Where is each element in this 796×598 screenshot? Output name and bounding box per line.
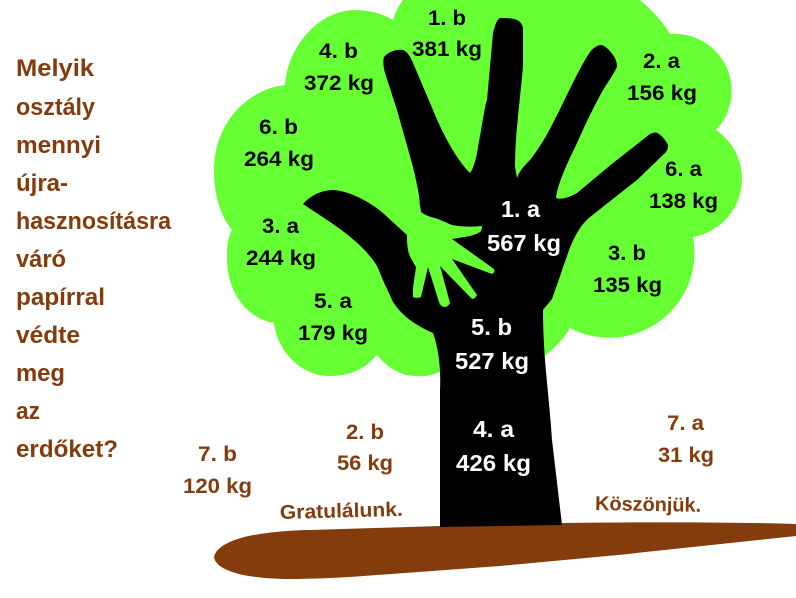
label: 7. b (183, 443, 252, 498)
question heading: meg (16, 360, 65, 387)
label: 5. a: 5. a (314, 290, 352, 313)
question heading: védte (16, 322, 80, 349)
label: 6. b: 264 kg (244, 148, 314, 171)
label: 6. a (649, 158, 718, 213)
ground (214, 522, 796, 579)
question heading: Melyik (16, 55, 95, 82)
label: 4. a: 4. a (473, 416, 514, 442)
question heading: osztály (16, 94, 96, 121)
question heading: mennyi (16, 132, 101, 159)
label: 7. b: 7. b (198, 443, 237, 466)
label: 1. b: 1. b (428, 7, 466, 30)
label: 3. b (593, 242, 662, 297)
note: Köszönjük: Köszönjük. (595, 493, 701, 517)
tree crown (214, 0, 742, 376)
note: Gratulálunk: Gratulálunk. (280, 499, 403, 524)
label: 2. b: 56 kg (337, 452, 393, 475)
label: 5. a: 179 kg (298, 322, 368, 345)
question heading (16, 55, 172, 463)
label: 5. b (455, 314, 529, 374)
question heading: erdőket? (16, 436, 118, 463)
label: 6. b (244, 116, 314, 171)
label: 6. a: 6. a (665, 158, 702, 181)
label: 1. a: 567 kg (487, 230, 561, 256)
question heading: az (16, 398, 40, 425)
label: 1. a: 1. a (501, 196, 540, 222)
label: 3. b: 3. b (608, 242, 646, 265)
label: 3. a: 3. a (262, 215, 299, 238)
label: 4. b: 4. b (319, 40, 358, 63)
label: 5. b: 5. b (471, 314, 512, 340)
label: 7. a (658, 412, 714, 467)
label: 1. b: 381 kg (412, 38, 482, 61)
label: 2. a (627, 50, 697, 105)
label: 2. b: 2. b (346, 421, 384, 444)
label: 2. b (337, 421, 393, 475)
label: 1. b (412, 7, 482, 61)
label: 2. a: 156 kg (627, 82, 697, 105)
label: 7. b: 120 kg (183, 475, 252, 498)
label: 4. b (304, 40, 374, 95)
question heading: váró (16, 246, 66, 273)
question heading: hasznosításra (16, 208, 172, 235)
label: 7. a: 31 kg (658, 444, 714, 467)
question heading: papírral (16, 284, 105, 311)
label: 6. a: 138 kg (649, 190, 718, 213)
label: 3. a: 244 kg (246, 247, 316, 270)
black hand-shaped tree trunk (303, 18, 668, 527)
label: 4. a: 426 kg (456, 450, 531, 476)
label: 5. b: 527 kg (455, 348, 529, 374)
label: 3. a (246, 215, 316, 270)
label: 2. a: 2. a (643, 50, 680, 73)
label: 4. b: 372 kg (304, 72, 374, 95)
label: 1. a (487, 196, 561, 256)
label: 7. a: 7. a (667, 412, 704, 435)
label: 6. b: 6. b (259, 116, 298, 139)
label: 4. a (456, 416, 531, 476)
small green child hand on the palm (407, 205, 494, 307)
question heading: újra- (16, 170, 68, 197)
label: 3. b: 135 kg (593, 274, 662, 297)
label: 5. a (298, 290, 368, 345)
